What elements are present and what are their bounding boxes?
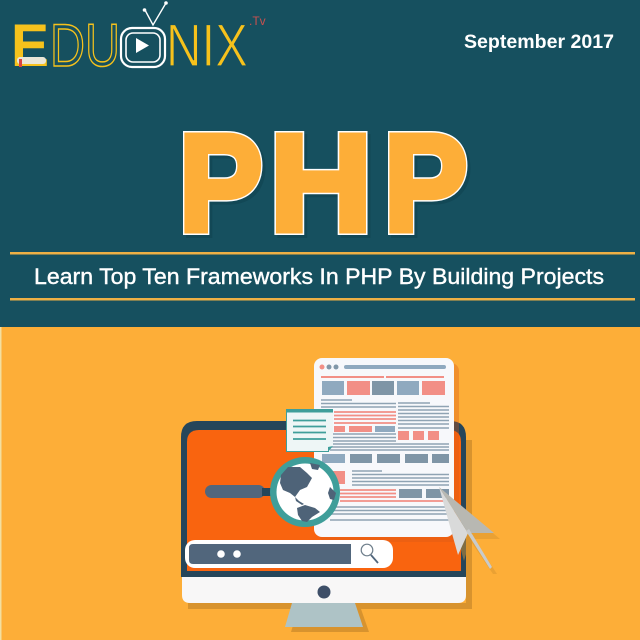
title: PHP: H: [270, 106, 372, 260]
title: PHP: P: [179, 106, 263, 260]
monitor chin: [182, 577, 466, 603]
logo: Eduonix: E: [11, 12, 49, 79]
search bar: [185, 540, 393, 568]
magnifier handle: [205, 485, 265, 498]
title: PHP: [179, 106, 471, 264]
title: PHP: P: [387, 110, 471, 264]
title: PHP: H: [272, 110, 376, 264]
title: PHP: P: [384, 106, 468, 260]
icon: search: [361, 544, 378, 563]
monitor stand: [285, 603, 369, 632]
monitor shadow: [188, 440, 472, 609]
logo: Eduonix: [11, 1, 266, 79]
subtitle with rules: Learn Top Ten Frameworks In PHP By Building Projects: [34, 264, 604, 289]
title: PHP: H: [270, 106, 372, 260]
monitor button: [318, 586, 330, 598]
panel: illustration background: [0, 327, 640, 640]
title: PHP: P: [182, 110, 266, 264]
title: PHP: P: [384, 106, 468, 260]
globe: [270, 457, 340, 527]
icon: note card: [286, 409, 333, 452]
monitor bezel: [181, 421, 466, 577]
title: PHP: P: [179, 106, 263, 260]
icon: magnifier globe: [205, 457, 340, 527]
icon: arrow cursor: [439, 487, 500, 574]
logo: Eduonix: .Tv: [249, 14, 266, 28]
panel: header background: [0, 0, 640, 327]
monitor screen: [187, 430, 461, 571]
logo: Eduonix: NIX: [166, 12, 248, 79]
web document panel: [314, 358, 459, 542]
logo: Eduonix: DU: [50, 12, 120, 79]
illustration: monitor: [181, 421, 472, 632]
date: September 2017: [464, 32, 614, 53]
